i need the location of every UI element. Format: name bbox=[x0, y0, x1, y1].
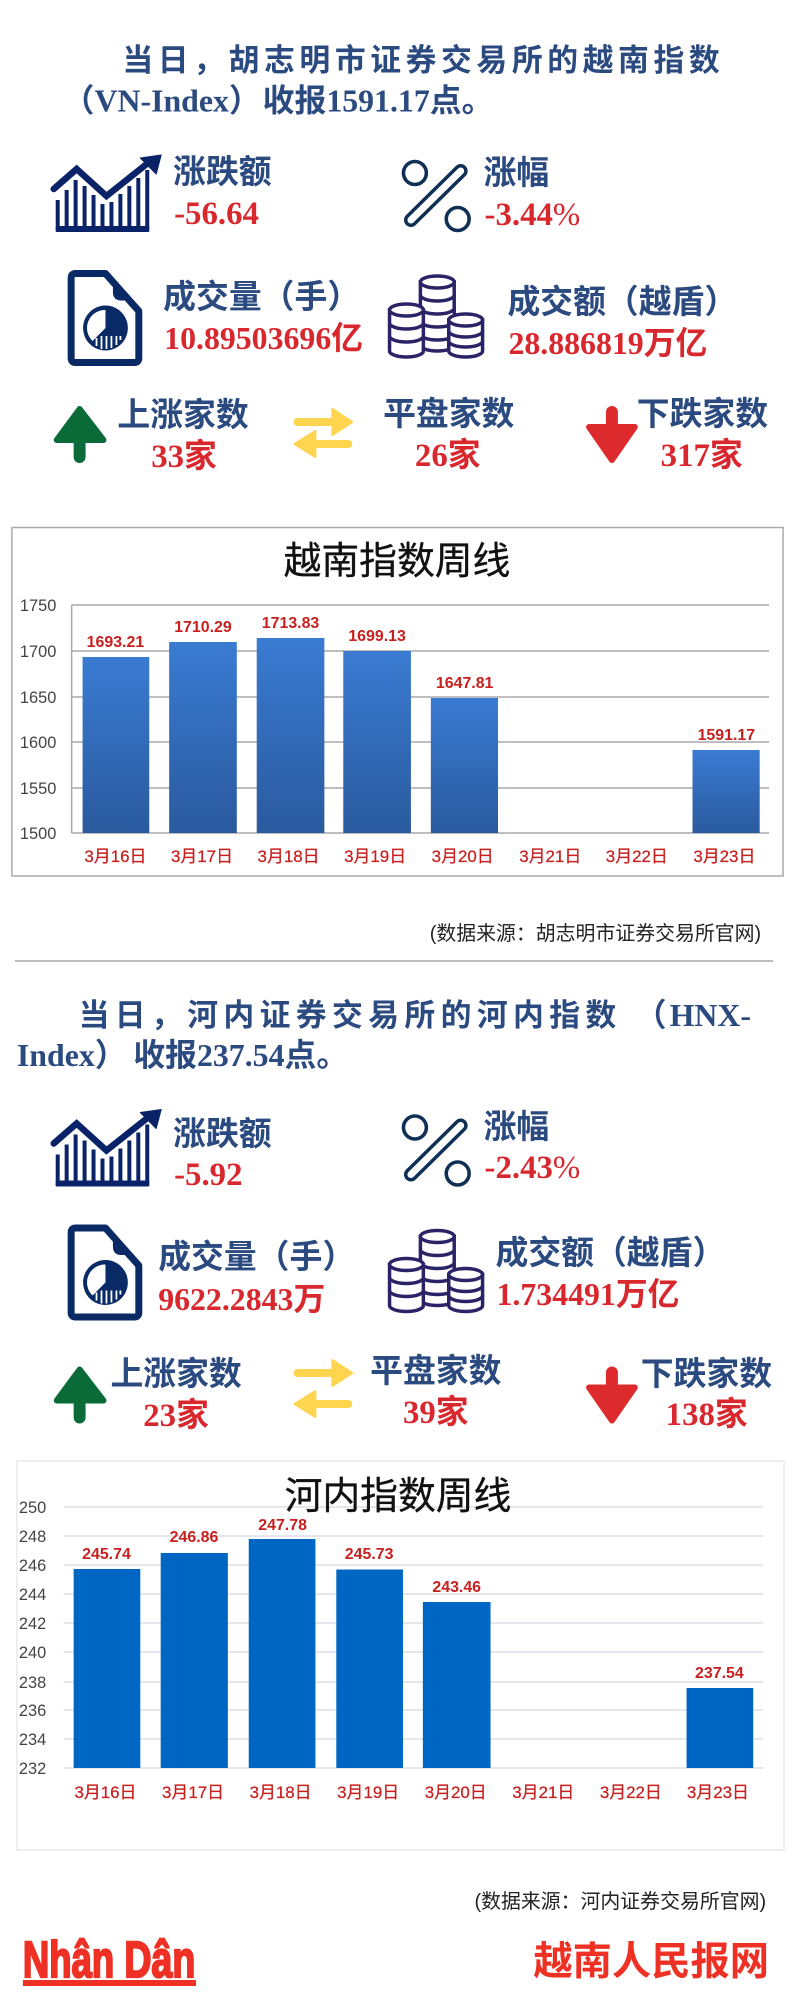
date labels: 3月16日 bbox=[74, 1783, 136, 1802]
heading: HNX-Index summary: Index） bbox=[17, 1038, 127, 1073]
date labels: 3月19日 bbox=[337, 1783, 399, 1802]
stat: advancers: 上涨家数 bbox=[110, 1348, 242, 1395]
date labels: 3月18日 bbox=[250, 1783, 312, 1802]
stat: turnover: 28.886819万亿 bbox=[508, 326, 707, 361]
logo: Nhan Dan bbox=[23, 1931, 196, 1988]
stat: volume: 9622.2843万 bbox=[158, 1282, 325, 1317]
stat: change percent: -2.43% bbox=[485, 1150, 580, 1186]
date labels: 3月22日 bbox=[600, 1783, 662, 1802]
date labels: 3月21日 bbox=[512, 1783, 574, 1802]
stat: turnover bbox=[507, 276, 737, 361]
y axis labels: 232 bbox=[19, 1760, 46, 1778]
value labels: 1693.21 bbox=[87, 634, 144, 651]
value labels bbox=[82, 1517, 744, 1682]
date labels: 3月20日 bbox=[425, 1783, 487, 1802]
y axis labels bbox=[19, 1499, 46, 1778]
y axis labels: 1550 bbox=[20, 780, 56, 798]
logo: Nhan Dan: Dân bbox=[124, 1931, 195, 1988]
stat: volume: 成交量（手） bbox=[158, 1231, 355, 1278]
icon: red down arrow bbox=[589, 406, 635, 460]
heading: HNX-Index summary: 当日，河内证券交易所的河内指数 bbox=[79, 990, 622, 1035]
value labels: 1591.17 bbox=[698, 727, 755, 744]
stat: unchanged: 26家 bbox=[415, 437, 481, 474]
value labels: 1647.81 bbox=[436, 675, 494, 692]
stat: unchanged: 39家 bbox=[403, 1394, 469, 1431]
icon: coin stacks bbox=[390, 276, 483, 357]
stat: decliners: 138家 bbox=[666, 1396, 748, 1433]
value labels bbox=[87, 615, 755, 744]
date labels: 3月17日 bbox=[171, 847, 233, 866]
chart title: 河内指数周线 bbox=[285, 1465, 511, 1520]
heading: VN-Index summary: 当日，胡志明市证券交易所的越南指数 bbox=[122, 35, 724, 80]
bars bbox=[74, 1539, 753, 1768]
panel: HNX-Index weekly chart bbox=[17, 1461, 784, 1850]
logo: Nhan Dan: Nhân bbox=[23, 1932, 114, 1988]
y axis labels: 236 bbox=[19, 1702, 46, 1720]
y axis labels bbox=[20, 597, 56, 843]
stat: unchanged: 平盘家数 bbox=[383, 388, 514, 435]
value labels: 247.78 bbox=[258, 1517, 307, 1534]
date labels: 3月17日 bbox=[162, 1783, 224, 1802]
stat: unchanged bbox=[383, 388, 514, 474]
date labels bbox=[84, 847, 755, 866]
date labels: 3月19日 bbox=[344, 847, 406, 866]
y axis labels: 1650 bbox=[20, 689, 56, 707]
value labels: 246.86 bbox=[170, 1529, 218, 1546]
stat: decliners bbox=[637, 388, 768, 474]
stat: change percent: -3.44% bbox=[485, 197, 580, 233]
y axis labels: 1750 bbox=[20, 597, 56, 615]
value labels: 1713.83 bbox=[262, 615, 319, 632]
heading: VN-Index summary: 收报1591.17点。 bbox=[263, 83, 493, 119]
panel: HNX-Index stats bbox=[54, 1101, 772, 1434]
stat: advancers bbox=[110, 1348, 242, 1434]
icon: green up arrow bbox=[57, 1370, 103, 1424]
date labels: 3月20日 bbox=[432, 847, 494, 866]
heading: VN-Index summary bbox=[63, 35, 724, 119]
y axis labels: 250 bbox=[19, 1499, 46, 1517]
date labels: 3月22日 bbox=[606, 847, 668, 866]
value labels: 245.73 bbox=[345, 1546, 394, 1563]
icon: green up arrow bbox=[57, 409, 103, 463]
source note: Hanoi exchange: (数据来源：河内证券交易所官网) bbox=[474, 1890, 766, 1913]
icon: red down arrow bbox=[589, 1366, 635, 1420]
heading: VN-Index summary: （VN-Index） bbox=[63, 83, 261, 119]
value labels: 1710.29 bbox=[174, 619, 232, 636]
stat: advancers: 23家 bbox=[143, 1397, 209, 1434]
y axis labels: 1600 bbox=[20, 734, 56, 752]
stat: decliners: 317家 bbox=[661, 437, 743, 474]
date labels: 3月23日 bbox=[693, 847, 755, 866]
y axis labels: 234 bbox=[19, 1731, 46, 1749]
heading: HNX-Index summary: HNX- bbox=[670, 998, 751, 1033]
date labels bbox=[74, 1783, 749, 1802]
stat: change percent bbox=[484, 1101, 580, 1186]
stat: decliners: 下跌家数 bbox=[637, 388, 768, 435]
icon: coin stacks bbox=[390, 1230, 483, 1312]
source note: Ho Chi Minh exchange: (数据来源：胡志明市证券交易所官网) bbox=[430, 922, 761, 945]
stat: turnover bbox=[496, 1227, 725, 1312]
stat: change amount: -56.64 bbox=[174, 196, 259, 232]
stat: volume: 10.89503696亿 bbox=[164, 321, 363, 356]
y axis labels: 242 bbox=[19, 1615, 46, 1633]
icon: document with pie chart bbox=[71, 274, 139, 362]
icon: document with pie chart bbox=[71, 1228, 139, 1317]
stat: change percent: 涨幅 bbox=[484, 147, 549, 194]
heading: HNX-Index summary: （ bbox=[635, 998, 667, 1033]
date labels: 3月16日 bbox=[84, 847, 146, 866]
stat: unchanged: 平盘家数 bbox=[370, 1345, 502, 1392]
stat: change amount bbox=[173, 146, 272, 232]
stat: volume bbox=[163, 271, 363, 356]
heading: HNX-Index summary bbox=[17, 990, 751, 1073]
value labels: 237.54 bbox=[695, 1665, 744, 1682]
date labels: 3月21日 bbox=[519, 847, 581, 866]
value labels: 243.46 bbox=[432, 1579, 481, 1596]
icon: rising trend chart bbox=[54, 155, 161, 232]
y axis labels: 240 bbox=[19, 1644, 46, 1662]
date labels: 3月18日 bbox=[258, 847, 320, 866]
y axis labels: 1500 bbox=[20, 825, 56, 843]
y axis labels: 246 bbox=[19, 1557, 46, 1575]
stat: turnover: 成交额（越盾） bbox=[507, 276, 737, 323]
bars bbox=[83, 638, 760, 833]
y axis labels: 1700 bbox=[20, 643, 56, 661]
icon: percent bbox=[403, 1116, 469, 1185]
stat: volume: 成交量（手） bbox=[163, 271, 360, 318]
value labels: 1699.13 bbox=[348, 628, 406, 645]
stat: decliners: 下跌家数 bbox=[641, 1348, 772, 1395]
icon: yellow exchange arrows bbox=[295, 1360, 352, 1417]
icon: rising trend chart bbox=[54, 1110, 161, 1186]
stat: turnover: 1.734491万亿 bbox=[497, 1277, 680, 1312]
stat: change percent: 涨幅 bbox=[484, 1101, 549, 1148]
y axis labels: 244 bbox=[19, 1586, 46, 1604]
y axis labels: 248 bbox=[19, 1528, 46, 1546]
date labels: 3月23日 bbox=[687, 1783, 749, 1802]
heading: HNX-Index summary: 收报237.54点。 bbox=[133, 1038, 348, 1073]
icon: yellow exchange arrows bbox=[295, 409, 352, 457]
panel: VN-Index weekly chart bbox=[12, 528, 783, 876]
stat: change amount: 涨跌额 bbox=[173, 1108, 272, 1155]
value labels: 245.74 bbox=[82, 1546, 131, 1563]
y axis labels: 238 bbox=[19, 1674, 46, 1692]
stat: unchanged bbox=[370, 1345, 502, 1431]
stat: advancers bbox=[117, 389, 249, 475]
panel: VN-Index stats bbox=[54, 146, 768, 475]
stat: change amount: 涨跌额 bbox=[173, 146, 272, 193]
stat: decliners bbox=[641, 1348, 772, 1433]
stat: volume bbox=[158, 1231, 355, 1317]
stat: change amount bbox=[173, 1108, 272, 1193]
stat: change percent bbox=[484, 147, 580, 233]
stat: change amount: -5.92 bbox=[174, 1157, 242, 1193]
stat: turnover: 成交额（越盾） bbox=[496, 1227, 725, 1274]
brand name: Vietnam People's Daily: 越南人民报网 bbox=[533, 1930, 769, 1987]
chart title: 越南指数周线 bbox=[284, 530, 510, 585]
stat: advancers: 33家 bbox=[151, 438, 217, 475]
stat: advancers: 上涨家数 bbox=[117, 389, 249, 436]
icon: percent bbox=[403, 162, 469, 230]
